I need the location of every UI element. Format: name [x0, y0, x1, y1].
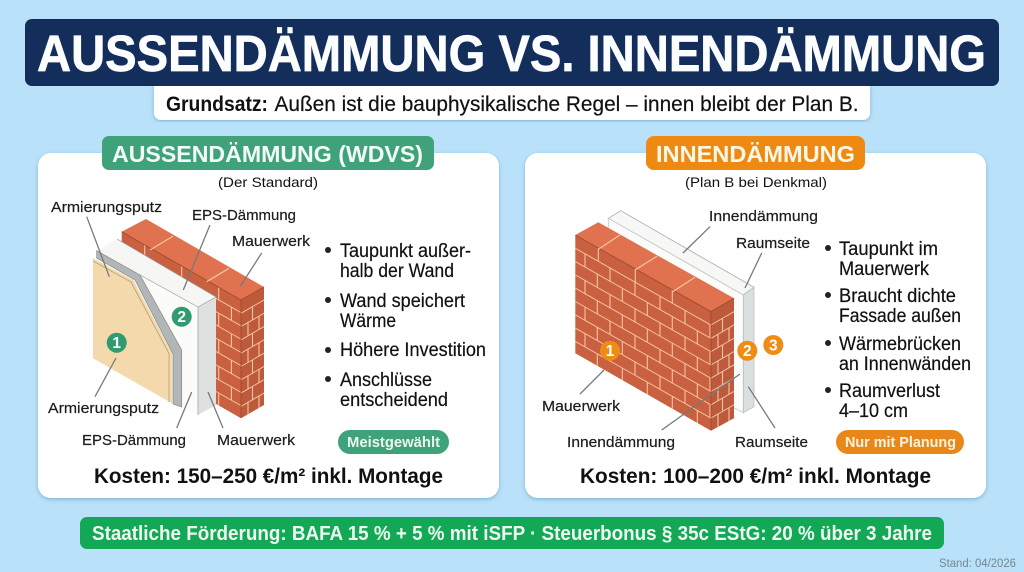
bullet list: Aussendämmung: Anschlüsse [340, 370, 432, 391]
cost: Aussendämmung: Kosten: 150–250 €/m² inkl. Montage [94, 465, 443, 488]
bullet list: Aussendämmung: Höhere Investition [340, 340, 486, 361]
label: Raumseite bottom: Raumseite [735, 434, 808, 451]
bullet list: Innendämmung: Fassade außen [839, 306, 961, 327]
funding banner: Staatliche Förderung: BAFA 15 % + 5 % mit iSFP · Steuerbonus § 35c EStG: 20 % über 3 Jahre [92, 523, 932, 545]
leader lines [580, 227, 775, 430]
brick wall [575, 222, 734, 434]
badge: Nur mit Planung: Nur mit Planung [845, 435, 956, 451]
badge 1 [107, 333, 127, 353]
badge 2: 2 [177, 309, 186, 326]
badge 2: 2 [743, 343, 752, 360]
bullet list: Aussendämmung [325, 241, 486, 411]
bullet list: Innendämmung: Taupunkt im [839, 239, 938, 260]
subheading: (Der Standard) [218, 174, 318, 190]
bullet list: Aussendämmung: entscheidend [340, 390, 448, 411]
label: Innendämmung bottom: Innendämmung [567, 434, 675, 451]
heading pill: Innendämmung: INNENDÄMMUNG [656, 141, 855, 167]
panel: Aussendämmung [38, 136, 499, 498]
bullet list: Innendämmung: Mauerwerk [839, 259, 929, 280]
label: Mauerwerk: Mauerwerk [542, 398, 621, 415]
EPS insulation block [97, 239, 216, 415]
panel: Innendämmung [525, 136, 986, 498]
cost: Innendämmung: Kosten: 100–200 €/m² inkl. Montage [580, 465, 931, 488]
subtitle [154, 80, 870, 120]
label: EPS-Dämmung top: EPS-Dämmung [192, 207, 296, 224]
bullet list: Aussendämmung: halb der Wand [340, 261, 454, 282]
bullet list: Aussendämmung: Wand speichert [340, 291, 466, 312]
label: Innendämmung top: Innendämmung [709, 208, 818, 225]
label: Armierungsputz top: Armierungsputz [51, 199, 162, 216]
badge: Meistgewählt: Meistgewählt [347, 435, 440, 451]
badge: Nur mit Planung [836, 430, 964, 454]
badge 3: 3 [769, 338, 778, 354]
bullet list: Innendämmung: an Innenwänden [839, 354, 971, 375]
date note: Stand: 04/2026 [939, 558, 1016, 570]
plaster layer [93, 258, 172, 403]
bullet list: Innendämmung: Raumverlust [839, 381, 941, 402]
insulation board [608, 211, 754, 413]
panel background [525, 153, 986, 498]
bullet list: Aussendämmung: Wärme [340, 311, 396, 332]
funding banner [80, 517, 944, 549]
label: Armierungsputz bottom: Armierungsputz [48, 400, 159, 417]
label: EPS-Dämmung bottom: EPS-Dämmung [82, 432, 186, 449]
heading pill: Aussendämmung: AUSSENDÄMMUNG (WDVS) [112, 141, 423, 167]
panel background [38, 153, 499, 498]
badge 2 [737, 341, 757, 361]
label: Raumseite top: Raumseite [736, 235, 810, 252]
subheading: (Plan B bei Denkmal) [685, 174, 827, 190]
bullet list: Innendämmung [825, 239, 971, 422]
badge 1: 1 [112, 335, 121, 352]
leader lines [87, 217, 262, 428]
subtitle: Außen ist die bauphysikalische Regel – innen bleibt der Plan B. [274, 93, 858, 116]
bullet list: Innendämmung: Braucht dichte [839, 286, 956, 307]
badge: Meistgewählt [338, 430, 449, 454]
bullet list: Innendämmung: 4–10 cm [839, 401, 908, 422]
wall diagram: interior insulation [542, 208, 818, 451]
bullet list: Aussendämmung: Taupunkt außer- [340, 241, 471, 262]
brick wall [122, 219, 264, 431]
reinforcement layer [97, 251, 182, 407]
badge 3 [763, 335, 783, 355]
badge 1: 1 [606, 343, 615, 360]
bullet list: Innendämmung: Wärmebrücken [839, 334, 961, 355]
badge 2 [172, 307, 192, 327]
badge 1 [600, 341, 620, 361]
heading pill: Innendämmung [646, 136, 865, 170]
wall diagram: exterior insulation [48, 199, 311, 449]
label: Mauerwerk top: Mauerwerk [232, 233, 311, 250]
subtitle: Grundsatz: [166, 93, 268, 116]
label: Mauerwerk bottom: Mauerwerk [217, 432, 296, 449]
